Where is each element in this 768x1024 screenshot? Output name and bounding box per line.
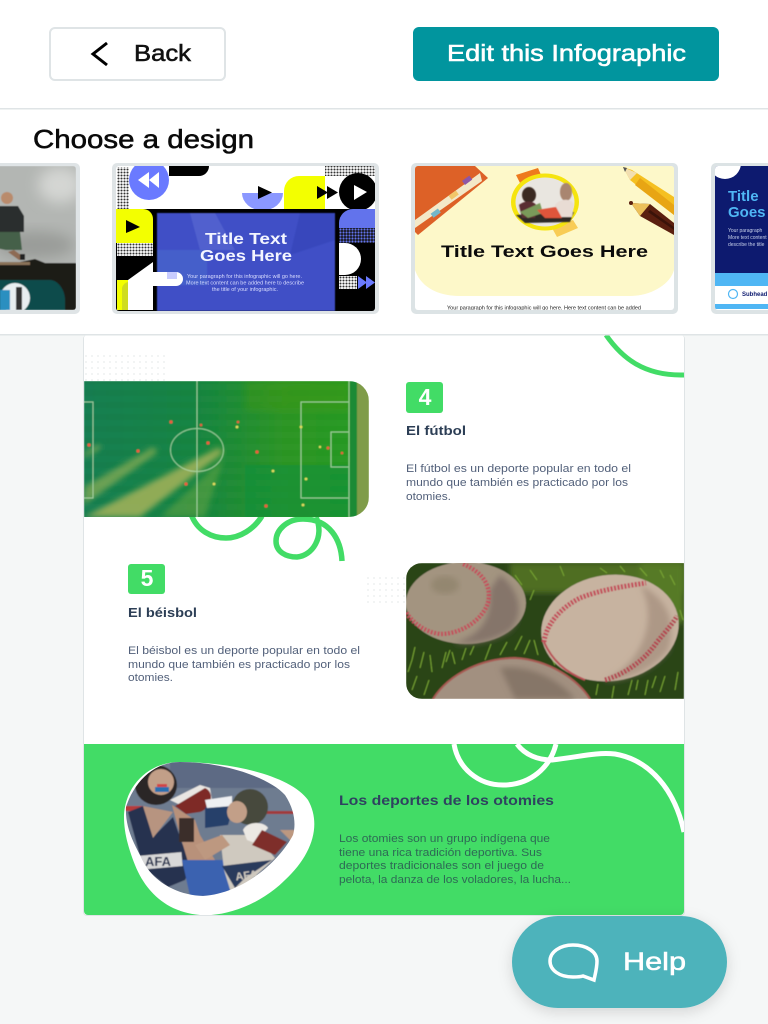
text: otomies description: deportes tradicionales son el juego de	[339, 860, 544, 872]
text: football description	[406, 463, 631, 503]
text: baseball description: El béisbol es un deporte popular en todo el	[128, 645, 360, 657]
card: title text goes here, school	[411, 163, 678, 314]
button: edit this infographic: Edit this Infographic	[447, 40, 686, 66]
heading: Los deportes de los otomies: Los deportes de los otomies	[339, 792, 554, 808]
curve: top right	[606, 335, 684, 375]
button: edit this infographic	[413, 27, 719, 81]
card: title goes here, navy: describe the title	[728, 242, 765, 248]
photo: boxers: AFA	[145, 854, 172, 869]
card: title goes here, navy	[711, 163, 768, 314]
button: back	[50, 28, 225, 80]
text: otomies description: Los otomies son un grupo indígena que	[339, 833, 550, 845]
curves: white lines	[454, 744, 684, 832]
button: help: Help	[623, 948, 686, 976]
card: title goes here, navy: Title	[728, 188, 759, 205]
card: title goes here, navy: Subhead	[742, 292, 768, 298]
text: baseball description: otomies.	[128, 672, 173, 684]
heading: El béisbol: El béisbol	[128, 605, 197, 620]
card: title text goes here, blue and yellow: Title Text	[205, 231, 288, 248]
text: otomies description: pelota, la danza de los voladores, la lucha...	[339, 874, 571, 886]
card: title text goes here, blue and yellow	[112, 160, 379, 314]
card: title text goes here, school: Your paragraph for this infographic will go here. Here text content can be added	[447, 306, 641, 312]
ball 3	[433, 658, 590, 699]
text: football description: El fútbol es un deporte popular en todo el	[406, 463, 631, 475]
heading: choose a design: Choose a design	[33, 124, 254, 154]
card: runner template	[0, 163, 82, 314]
dot pattern: top left	[84, 353, 169, 381]
card: title text goes here, blue and yellow: Your paragraph for this infographic will go here.	[187, 274, 302, 280]
icon: chevron left	[93, 43, 107, 65]
photo: boxers: AFA	[235, 869, 258, 884]
badge: 5	[128, 564, 165, 594]
card: title text goes here, blue and yellow: Goes Here	[200, 248, 292, 265]
text: football description: mundo que también es practicado por los	[406, 477, 629, 489]
heading: El fútbol: El fútbol	[406, 423, 466, 438]
left boxer	[128, 806, 192, 887]
card: title goes here, navy: Your paragraph	[728, 228, 763, 234]
button: help	[512, 916, 727, 1008]
panel: green band	[84, 744, 684, 915]
icon: speech bubble	[550, 945, 597, 980]
ball 2	[540, 574, 680, 682]
curve: under football photo	[191, 514, 342, 561]
infographic sheet	[83, 335, 685, 916]
photo panel	[157, 213, 335, 311]
text: otomies description: tiene una rica tradición deportiva. Sus	[339, 847, 543, 859]
photo: baseballs on grass	[406, 562, 686, 699]
header bar	[0, 0, 768, 336]
button: back: Back	[134, 40, 192, 66]
card: title text goes here, blue and yellow: More text content can be added here to describe	[186, 280, 304, 286]
card: title goes here, navy: Goes	[728, 204, 766, 221]
badge: 5: 5	[141, 565, 154, 591]
blob: white backing	[124, 762, 314, 915]
text: baseball description	[128, 645, 360, 684]
right boxer	[220, 835, 275, 896]
dot pattern: beside baseball	[367, 574, 406, 606]
photo: football field aerial	[84, 381, 369, 518]
card: title goes here, navy: More text content	[728, 235, 767, 241]
card: title text goes here, school: Title Text Goes Here	[441, 242, 648, 261]
card: title text goes here, blue and yellow: the title of your infographic.	[212, 287, 278, 293]
badge: 4: 4	[419, 384, 432, 410]
text: otomies description	[339, 833, 571, 886]
page background	[0, 335, 768, 1024]
ball 1	[406, 562, 526, 644]
text: baseball description: mundo que también es practicado por los	[128, 659, 351, 671]
photo: boxers	[126, 762, 294, 896]
text: football description: otomies.	[406, 491, 451, 503]
badge: 4	[406, 382, 443, 413]
